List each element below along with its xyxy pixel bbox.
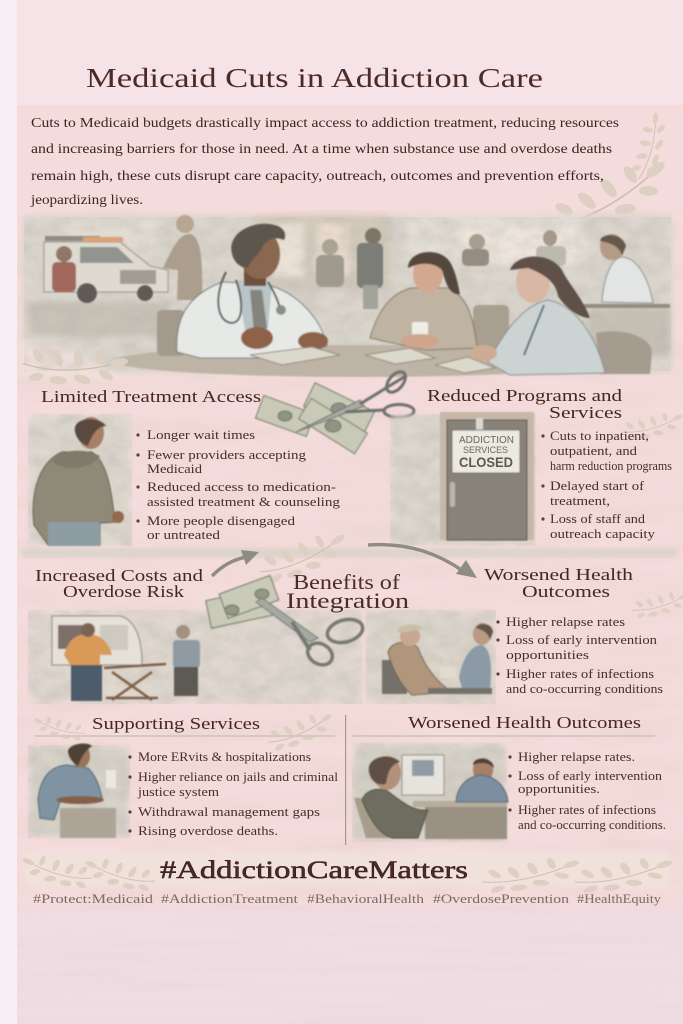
leaf ornament	[19, 330, 131, 405]
bullet list: Delayed start of	[550, 478, 645, 493]
bullet list: More people disengaged	[147, 513, 296, 528]
heading	[484, 565, 634, 601]
bullet list: Rising overdose deaths.	[138, 823, 278, 838]
divider band with leaves	[22, 530, 677, 586]
bullet list	[496, 614, 663, 696]
panel: reduced programs and services	[390, 386, 683, 546]
heading: Worsened Health Outcomes	[408, 713, 641, 732]
bullet list: Longer wait times	[147, 427, 255, 442]
heading: Worsened Health	[484, 565, 634, 584]
illustration: closed door	[390, 412, 536, 546]
bullet list: Reduced access to medication-	[147, 479, 336, 494]
heading: Outcomes	[522, 582, 610, 601]
bullet list: Higher rates of infections	[518, 802, 656, 817]
bullet list: Cuts to inpatient,	[550, 428, 649, 443]
closed sign text	[459, 434, 514, 470]
leaf ornament	[622, 412, 683, 442]
hashtag row: #BehavioralHealth	[307, 892, 425, 906]
bullet list: justice system	[137, 784, 219, 799]
bullet list: treatment,	[550, 493, 610, 508]
bullet list: and co-occurring conditions.	[518, 817, 666, 832]
hashtag row	[33, 892, 662, 906]
intro text block: remain high, these cuts disrupt care capacity, outreach, outcomes and prevention efforts,	[31, 168, 604, 183]
heading: Increased Costs and	[35, 566, 204, 585]
arrow: curved up-right	[212, 550, 259, 576]
intro text block: Cuts to Medicaid budgets drastically impact access to addiction treatment, reducing resources	[31, 115, 619, 130]
leaf ornaments	[22, 855, 673, 894]
heading	[427, 386, 623, 422]
heading: Limited Treatment Access	[41, 387, 261, 406]
right doctor	[580, 234, 670, 308]
ambulance	[44, 236, 168, 303]
intro text block: and increasing barriers for those in need. At a time when substance use and overdose deaths	[31, 141, 612, 156]
heading: benefits of integration	[286, 570, 409, 613]
bullet list: outpatient, and	[550, 443, 638, 458]
illustration: ambulance and stretcher	[28, 610, 362, 704]
footer band: main hashtag	[22, 852, 673, 894]
bullet list: Higher relapse rates	[506, 614, 625, 629]
bullet list: outreach capacity	[550, 526, 656, 541]
arrow: curved down-right	[368, 545, 477, 578]
bullet list: harm reduction programs	[550, 458, 672, 473]
heading: benefits of integration: Benefits of	[293, 570, 400, 594]
heading	[35, 566, 204, 601]
intro text block	[30, 115, 619, 207]
illustration: counseling session	[366, 610, 496, 704]
background staff figures	[163, 215, 566, 309]
panel: worsened health outcomes (lower)	[352, 713, 666, 842]
papers on table	[250, 347, 495, 373]
bullet list: Loss of early intervention	[518, 768, 663, 783]
icon: scissors cutting dollar bills	[256, 368, 414, 454]
hashtag heading: #AddictionCareMatters	[160, 857, 468, 884]
bullet list: Higher reliance on jails and criminal	[138, 769, 338, 784]
bullet list: Higher rates of infections	[506, 666, 654, 681]
bullet list: opportunities.	[518, 781, 600, 796]
hashtag row: #HealthEquity	[577, 892, 662, 906]
closed sign text: SERVICES	[463, 445, 508, 456]
decorative leaves: intro	[541, 110, 682, 246]
bullet list: More ERvits & hospitalizations	[138, 749, 311, 764]
bullet list: Fewer providers accepting	[147, 447, 307, 462]
panel: supporting services	[28, 711, 338, 838]
heading: Supporting Services	[92, 714, 260, 733]
intro text block: jeopardizing lives.	[30, 192, 143, 207]
bullet list	[136, 427, 341, 542]
leaf ornament	[632, 592, 683, 619]
heading: Overdose Risk	[63, 582, 185, 601]
chairs	[157, 305, 652, 374]
bullet list: and co-occurring conditions	[506, 681, 663, 696]
closed sign text: CLOSED	[459, 455, 513, 470]
hashtag row: #AddictionTreatment	[161, 892, 299, 906]
illustration: man reading at desk	[28, 744, 130, 838]
illustration: man in hoodie at counter	[28, 414, 132, 546]
hashtag row: #OverdosePrevention	[433, 892, 570, 906]
hero background	[20, 215, 673, 378]
heading: Services	[549, 403, 622, 422]
bullet list	[541, 428, 672, 541]
bullet list: Higher relapse rates.	[518, 749, 635, 764]
panel: increased costs and overdose risk	[28, 566, 362, 704]
panel: worsened health outcomes (upper)	[366, 565, 683, 704]
leaf ornaments	[33, 711, 336, 753]
bullet list: or untreated	[147, 527, 221, 542]
hero illustration: clinicians meeting around table	[19, 215, 673, 405]
icon: scissors and money	[206, 576, 365, 669]
title: Medicaid Cuts in Addiction Care	[86, 63, 543, 93]
seated patient	[370, 252, 477, 350]
illustration: consultation at desk	[352, 743, 508, 842]
bullet list: assisted treatment & counseling	[147, 494, 341, 509]
heading: benefits of integration: Integration	[286, 588, 409, 613]
bullet list: Withdrawal management gaps	[138, 804, 320, 819]
closed sign text: ADDICTION	[459, 434, 514, 446]
bullet list: opportunities	[506, 647, 589, 662]
panel: limited treatment access	[28, 387, 341, 546]
bullet list: Loss of early intervention	[506, 632, 658, 647]
bullet list	[128, 749, 338, 838]
hashtag row: #Protect:Medicaid	[33, 892, 154, 906]
bullet list	[508, 749, 666, 832]
doctor	[177, 224, 328, 358]
table	[114, 345, 606, 377]
bullet list: Medicaid	[147, 461, 203, 476]
heading: Reduced Programs and	[427, 386, 623, 405]
clinician with ponytail	[471, 256, 605, 375]
bullet list: Loss of staff and	[550, 511, 646, 526]
